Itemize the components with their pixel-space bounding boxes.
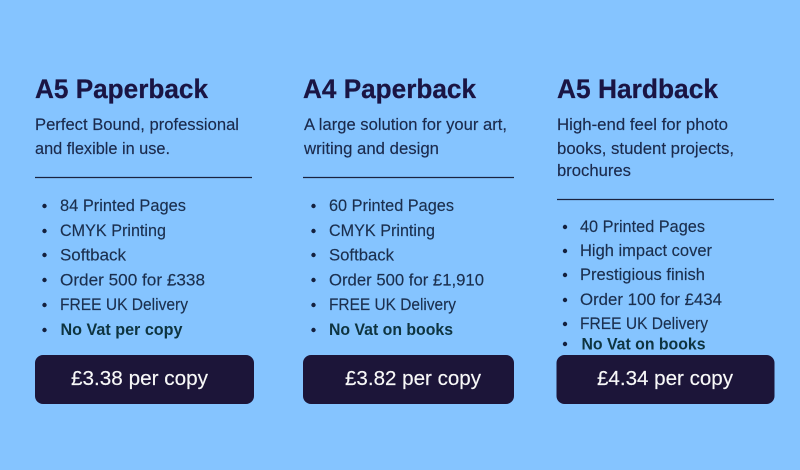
price button: £4.34 per copy [556,355,774,404]
feature list: A4 Paperback: FREE UK Delivery [329,296,457,314]
feature list: A5 Hardback [563,218,722,354]
price button: £3.82 per copy [303,355,514,404]
panel: A4 Paperback [303,74,514,404]
description: A4 Paperback: A large solution for your art, [304,116,507,134]
feature list: A5 Hardback: No Vat on books [582,336,706,354]
description: A5 Paperback: and flexible in use. [35,140,170,158]
feature list: A4 Paperback [311,197,484,339]
feature list: A5 Paperback: Order 500 for £338 [60,272,205,290]
description: A5 Paperback [35,116,239,158]
feature list: A5 Hardback: High impact cover [580,242,712,260]
feature list: A5 Paperback: Softback [60,246,127,264]
description: A5 Paperback: Perfect Bound, professional [35,116,239,134]
feature list: A4 Paperback: Order 500 for £1,910 [329,272,484,290]
price button: £3.82 per copy: £3.82 per copy [345,368,481,390]
description: A5 Hardback: books, student projects, [557,140,734,158]
feature list: A5 Paperback: No Vat per copy [60,321,183,339]
price button: £3.38 per copy [35,355,254,404]
feature list: A5 Paperback: 84 Printed Pages [60,197,186,215]
feature list: A4 Paperback: CMYK Printing [329,222,435,240]
feature list: A5 Hardback: Order 100 for £434 [580,291,722,309]
panel: A5 Hardback [556,74,774,404]
feature list: A5 Hardback: 40 Printed Pages [580,218,705,236]
description: A5 Hardback [557,116,734,180]
heading: A4 Paperback: A4 Paperback [303,74,476,104]
feature list: A4 Paperback: No Vat on books [329,321,453,339]
feature list: A5 Paperback: CMYK Printing [60,222,166,240]
panel: A5 Paperback [35,74,254,404]
description: A4 Paperback [303,116,507,158]
feature list: A5 Hardback: Prestigious finish [580,266,705,284]
feature list: A4 Paperback: 60 Printed Pages [329,197,454,215]
feature list: A5 Paperback: FREE UK Delivery [60,296,189,314]
heading: A5 Hardback: A5 Hardback [557,74,718,104]
description: A5 Hardback: High-end feel for photo [557,116,728,134]
price button: £4.34 per copy: £4.34 per copy [597,368,733,390]
description: A5 Hardback: brochures [557,162,631,180]
price button: £3.38 per copy: £3.38 per copy [71,368,208,390]
feature list: A4 Paperback: Softback [329,246,395,264]
description: A4 Paperback: writing and design [303,140,439,158]
feature list: A5 Paperback [42,197,205,339]
feature list: A5 Hardback: FREE UK Delivery [580,315,709,333]
heading: A5 Paperback: A5 Paperback [35,74,208,104]
